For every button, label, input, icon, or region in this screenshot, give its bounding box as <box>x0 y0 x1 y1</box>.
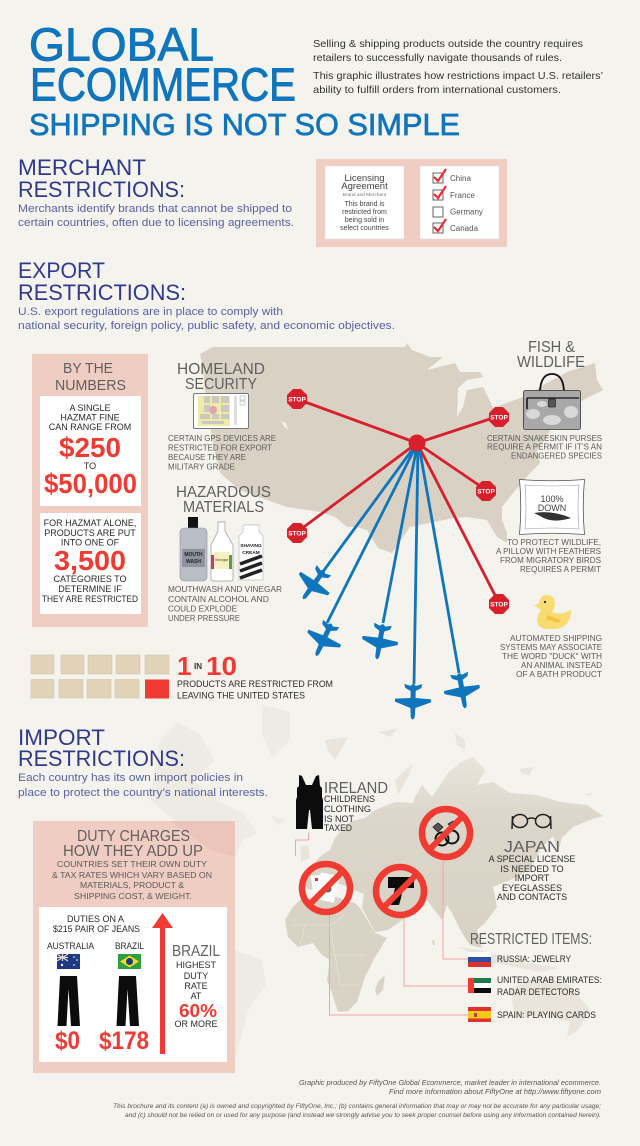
hazardous materials block: UNDER PRESSURE <box>168 613 240 623</box>
intro text: This graphic illustrates how restrictions impact U.S. retailers’ <box>313 70 603 82</box>
flag: Spain <box>468 1007 491 1022</box>
hazardous materials block <box>168 484 282 623</box>
Africa <box>285 895 387 1012</box>
merchant restrictions heading: certain countries, often due to licensing agreements. <box>18 217 294 229</box>
homeland security block <box>168 361 276 472</box>
panel: by the numbers <box>32 354 148 627</box>
panel: duty charges: HOW THEY ADD UP <box>63 843 203 860</box>
duties comparison card: BRAZIL <box>115 941 144 951</box>
1 in 10 statistic: IN <box>194 662 202 671</box>
origin hub <box>408 434 426 452</box>
hazmat categories box: PRODUCTS ARE PUT <box>44 528 136 538</box>
licensing agreement card: Brand and Merchant <box>343 192 387 198</box>
pillow block: REQUIRES A PERMIT <box>520 564 601 574</box>
Indonesia and Australia <box>458 947 590 1037</box>
pillow block: A PILLOW WITH FEATHERS <box>496 546 601 556</box>
stop signs: STOP <box>288 530 306 538</box>
prohibited: jewelry <box>422 809 470 857</box>
fish and wildlife block: FISH & <box>528 339 576 356</box>
hazardous materials block: MATERIALS <box>183 499 264 516</box>
Brazil callout: AT <box>191 991 202 1001</box>
Brazil callout: BRAZIL <box>172 943 220 960</box>
intro text: Selling & shipping products outside the country requires <box>313 38 583 50</box>
hazmat categories box <box>40 513 141 614</box>
stop signs: STOP <box>288 396 306 404</box>
panel: licensing example <box>316 159 507 247</box>
fish and wildlife block: ENDANGERED SPECIES <box>511 450 602 460</box>
import restrictions heading: IMPORT <box>18 725 105 750</box>
icon: vinegar bottle: Vinegar <box>215 557 229 562</box>
duck block: OF A BATH PRODUCT <box>516 669 602 679</box>
restricted items legend: UNITED ARAB EMIRATES: <box>497 975 602 985</box>
panel: duty charges: COUNTRIES SET THEIR OWN DUTY <box>57 859 207 869</box>
panel: duty charges: SHIPPING COST, & WEIGHT. <box>74 891 192 901</box>
1 in 10 statistic: 1 <box>177 651 191 681</box>
duck block: AUTOMATED SHIPPING <box>510 633 602 643</box>
flag: Russia <box>468 952 491 967</box>
hazmat categories box: 3,500 <box>54 545 126 576</box>
duck block: SYSTEMS MAY ASSOCIATE <box>500 642 602 652</box>
panel: by the numbers: BY THE <box>63 360 113 377</box>
1 in 10 pictogram <box>31 655 169 698</box>
panel: duty charges <box>33 821 235 1073</box>
hazmat categories box: CATEGORIES TO <box>53 574 127 584</box>
Ireland block: IRELAND <box>324 780 388 797</box>
import restrictions heading: place to protect the country’s national interests. <box>18 787 268 799</box>
duties comparison card: AUSTRALIA <box>47 941 94 951</box>
restricted items legend <box>468 931 602 1022</box>
import restrictions heading: RESTRICTIONS: <box>18 746 185 771</box>
stop signs: STOP <box>477 488 495 496</box>
hazardous materials block: MOUTHWASH AND VINEGAR <box>168 584 282 594</box>
Ireland block: TAXED <box>324 823 352 833</box>
1 in 10 statistic: 10 <box>206 651 237 681</box>
intro text: retailers to successfully navigate thousands of rules. <box>313 52 562 64</box>
duties comparison card: $178 <box>99 1027 149 1055</box>
map: faint Americas and Greenland <box>150 705 290 1060</box>
duties comparison card: $215 PAIR OF JEANS <box>53 924 140 934</box>
duties comparison card: DUTIES ON A <box>67 914 124 924</box>
licensing agreement card: Agreement <box>341 181 388 192</box>
icon: GPS device <box>194 394 248 428</box>
hazmat fine box: A SINGLE <box>69 403 111 413</box>
country checklist card: Germany <box>450 208 483 216</box>
hazmat fine box: TO <box>84 461 96 471</box>
icon: jeans Australia <box>58 976 80 1026</box>
title <box>29 18 460 142</box>
panel: duty charges: DUTY CHARGES <box>77 828 190 845</box>
Madagascar <box>375 975 385 996</box>
1 in 10 statistic: PRODUCTS ARE RESTRICTED FROM <box>177 679 333 689</box>
icon: mouthwash bottle <box>180 517 207 581</box>
restricted items legend: RESTRICTED ITEMS: <box>470 931 592 948</box>
Brazil callout: 60% <box>179 1001 217 1021</box>
duck block <box>500 595 602 679</box>
icon: down pillow <box>520 480 584 534</box>
homeland security block: HOMELAND <box>177 361 265 378</box>
stop signs: STOP <box>490 602 508 608</box>
country checklist card: Canada <box>450 224 479 233</box>
export restrictions heading: RESTRICTIONS: <box>18 280 186 305</box>
Japan block: JAPAN <box>504 839 560 856</box>
Japan block: IMPORT <box>515 873 550 883</box>
Ireland block: CLOTHING <box>324 804 371 814</box>
Brazil callout: HIGHEST <box>176 960 216 970</box>
merchant restrictions heading: MERCHANT <box>18 155 146 180</box>
map: Eurasia, Africa and islands <box>285 728 603 1037</box>
duties comparison card <box>39 907 227 1062</box>
Ireland block: IS NOT <box>324 814 354 824</box>
import restrictions heading: Each country has its own import policies in <box>18 772 243 784</box>
Brazil callout: OR MORE <box>174 1019 218 1029</box>
icon: jeans Brazil <box>116 976 139 1026</box>
duck block: AN ANIMAL INSTEAD <box>521 660 602 670</box>
merchant restrictions heading <box>18 155 294 229</box>
title: GLOBAL <box>29 18 214 70</box>
hazmat fine box: HAZMAT FINE <box>60 412 120 422</box>
homeland security block: BECAUSE THEY ARE <box>168 452 246 462</box>
panel: duty charges: & TAX RATES WHICH VARY BASED ON <box>52 870 212 880</box>
export restrictions heading <box>18 258 395 332</box>
Japan block: EYEGLASSES <box>502 883 562 893</box>
Eurasia <box>300 757 603 948</box>
flag: UAE <box>468 978 491 993</box>
icon: snakeskin purse <box>524 374 580 430</box>
pillow block <box>496 480 601 574</box>
merchant restrictions heading: RESTRICTIONS: <box>18 177 185 202</box>
icon: mouthwash bottle: WASH <box>186 559 201 565</box>
Japan block <box>489 814 575 902</box>
plane icons <box>289 560 483 720</box>
country checklist card: France <box>450 191 475 200</box>
Africa borders <box>292 915 365 985</box>
hazardous materials block: COULD EXPLODE <box>168 604 237 614</box>
footer credits: Find more information about FiftyOne at http://www.fiftyone.com <box>389 1087 601 1096</box>
icon: mouthwash bottle: MOUTH <box>184 552 203 558</box>
prohibited: playing cards <box>302 864 350 912</box>
restricted items legend: RADAR DETECTORS <box>497 987 580 997</box>
flag: Brazil <box>118 954 141 969</box>
panel: by the numbers: NUMBERS <box>55 377 126 394</box>
hazmat categories box: FOR HAZMAT ALONE, <box>44 518 136 528</box>
title: SHIPPING IS NOT SO SIMPLE <box>29 107 460 142</box>
country checklist card <box>420 166 499 239</box>
icon: down pillow: DOWN <box>538 503 566 513</box>
stop signs <box>287 389 509 614</box>
restricted items legend: RUSSIA: JEWELRY <box>497 954 571 964</box>
country checklist card: China <box>450 174 471 183</box>
routes: allowed blue lines <box>322 446 459 684</box>
hazardous materials block: CONTAIN ALCOHOL AND <box>168 594 269 604</box>
Brazil callout <box>172 943 220 1029</box>
export restrictions heading: national security, foreign policy, public safety, and economic objectives. <box>18 320 395 332</box>
fish and wildlife block: WILDLIFE <box>517 354 585 371</box>
Japan block: IS NEEDED TO <box>500 864 564 874</box>
flag: Australia <box>57 954 80 969</box>
footer credits: and (c) should not be relied on or used for any purpose (and instead we strongly advise you to seek proper counsel before using any information contained herein). <box>125 1112 601 1119</box>
map: United States <box>200 343 603 553</box>
merchant restrictions heading: Merchants identify brands that cannot be shipped to <box>18 203 292 215</box>
title: ECOMMERCE <box>30 58 296 110</box>
Arctic islands and Japan <box>300 728 592 862</box>
panel: duty charges: MATERIALS, PRODUCT & <box>80 880 184 890</box>
icon: shaving cream can <box>239 525 263 580</box>
fish and wildlife block: REQUIRE A PERMIT IF IT’S AN <box>487 442 602 452</box>
import restrictions heading <box>18 725 268 799</box>
licensing agreement card: This brand is <box>344 201 385 208</box>
routes: blocked red lines <box>297 399 499 603</box>
licensing agreement card: restricted from <box>342 209 387 216</box>
Ireland block: CHILDRENS <box>324 794 375 804</box>
pillow block: TO PROTECT WILDLIFE, <box>507 537 601 547</box>
hazmat categories box: DETERMINE IF <box>58 584 122 594</box>
Japan block: A SPECIAL LICENSE <box>489 854 575 864</box>
1 in 10 statistic: LEAVING THE UNITED STATES <box>177 690 305 700</box>
1 in 10 statistic <box>177 651 333 700</box>
Ireland block <box>296 775 388 833</box>
hazardous materials block: HAZARDOUS <box>176 484 271 501</box>
icon: overalls <box>296 775 323 829</box>
icon: shaving cream can: SHAVING <box>240 543 262 549</box>
footer credits <box>113 1078 601 1119</box>
hazmat categories box: INTO ONE OF <box>61 538 120 548</box>
Brazil callout: DUTY <box>184 971 208 981</box>
hazmat fine box: $250 <box>59 432 121 463</box>
stop signs: STOP <box>490 414 508 422</box>
fish and wildlife block: CERTAIN SNAKESKIN PURSES <box>487 433 602 443</box>
export restrictions heading: EXPORT <box>18 258 105 283</box>
connector lines <box>296 833 468 1015</box>
intro text <box>313 38 603 96</box>
icon: rubber duck <box>534 595 571 629</box>
licensing agreement card <box>325 166 404 239</box>
icon: eyeglasses <box>512 814 551 829</box>
homeland security block: RESTRICTED FOR EXPORT <box>168 442 272 452</box>
footer credits: Graphic produced by FiftyOne Global Ecommerce, market leader in international ecommerce. <box>299 1078 601 1087</box>
duck block: THE WORD "DUCK" WITH <box>502 651 602 661</box>
icon: shaving cream can: CREAM <box>242 550 260 556</box>
hazmat fine box: $50,000 <box>44 468 137 499</box>
prohibited: radar detector <box>376 867 424 915</box>
licensing agreement card: select countries <box>340 225 389 232</box>
Brazil callout: RATE <box>184 981 208 991</box>
pillow block: FROM MIGRATORY BIRDS <box>500 555 601 565</box>
arrow: rising duty <box>152 913 173 1054</box>
hazmat categories box: THEY ARE RESTRICTED <box>42 594 138 604</box>
homeland security block: MILITARY GRADE <box>168 462 235 472</box>
Japan block: AND CONTACTS <box>497 892 567 902</box>
homeland security block: CERTAIN GPS DEVICES ARE <box>168 433 276 443</box>
intro text: ability to fulfill orders from international customers. <box>313 84 561 96</box>
export restrictions heading: U.S. export regulations are in place to comply with <box>18 306 283 318</box>
icon: down pillow: 100% <box>540 494 564 504</box>
licensing agreement card: being sold in <box>345 217 384 224</box>
duties comparison card: $0 <box>55 1027 80 1055</box>
footer credits: This brochure and its content (a) is owned and copyrighted by FiftyOne, Inc.; (b) contains general information that may or may not be accurate for any particular usage; <box>113 1103 601 1110</box>
restricted items legend: SPAIN: PLAYING CARDS <box>497 1010 596 1020</box>
hazmat fine box: CAN RANGE FROM <box>49 422 131 432</box>
homeland security block: SECURITY <box>185 376 257 393</box>
fish and wildlife block <box>487 339 602 460</box>
hazmat fine box <box>40 396 141 506</box>
licensing agreement card: Licensing <box>344 173 385 184</box>
